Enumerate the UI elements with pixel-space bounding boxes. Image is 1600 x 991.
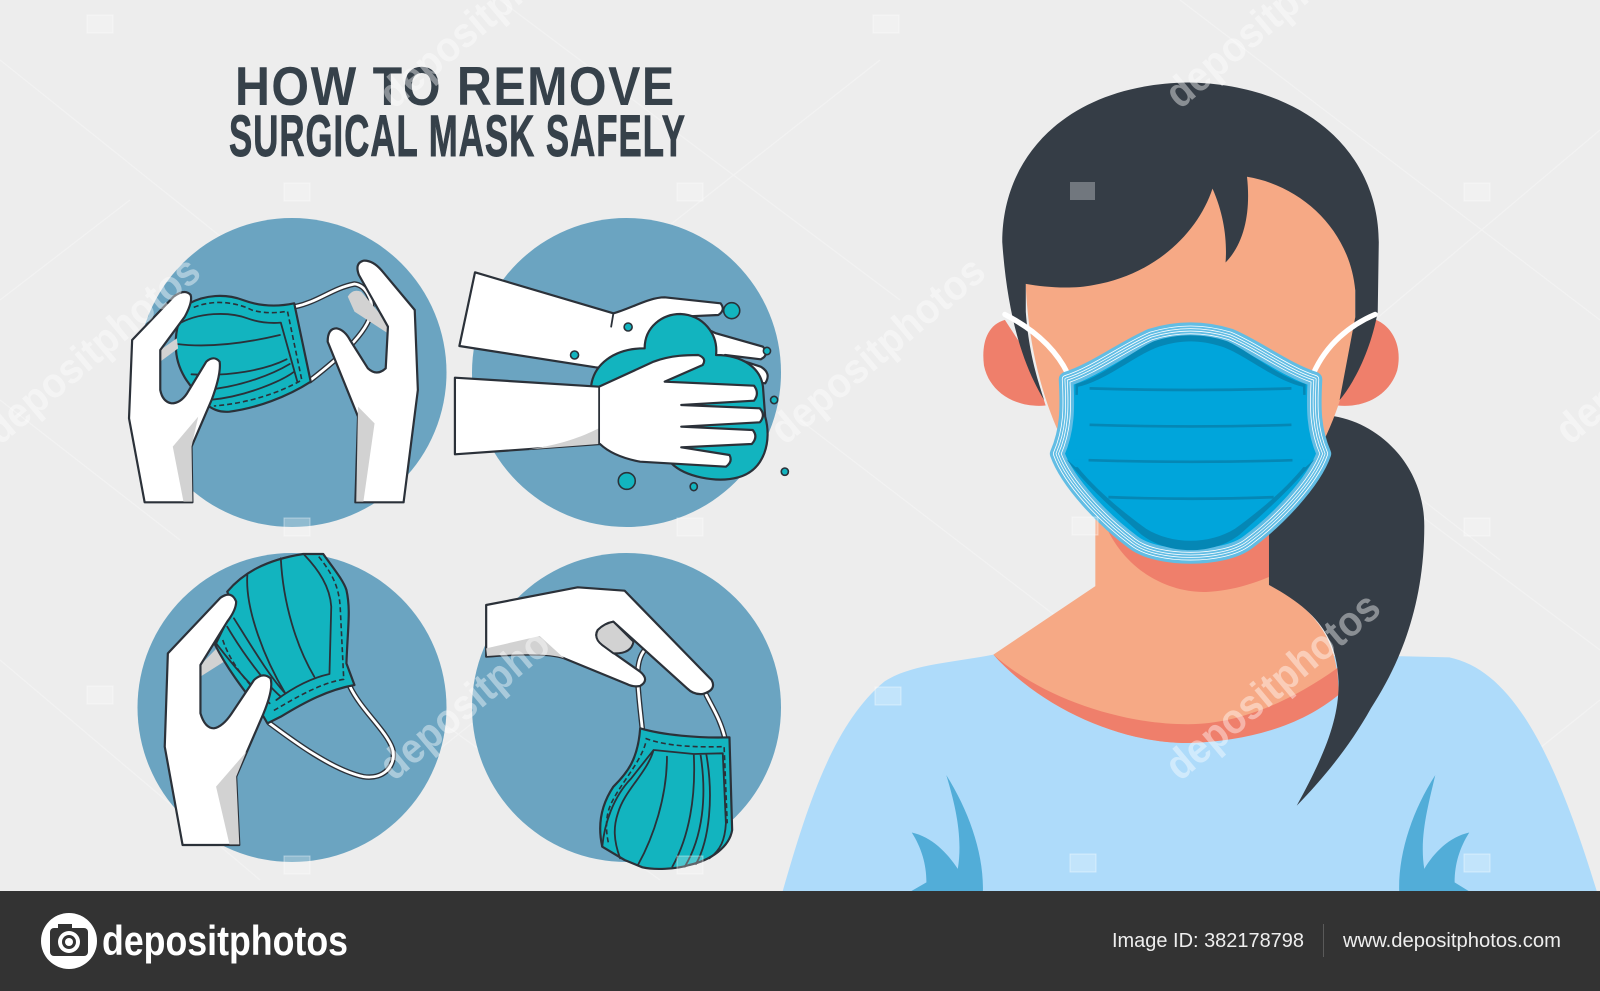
illustration: woman wearing surgical mask bbox=[783, 82, 1597, 891]
neck and chest bbox=[993, 515, 1339, 743]
upper arm and hand bbox=[459, 272, 768, 383]
neck shadow bbox=[1102, 515, 1269, 592]
panel: step 3 hold mask by ear loop bbox=[138, 553, 446, 862]
title: HOW TO REMOVE bbox=[235, 55, 677, 117]
shirt fold left bbox=[911, 775, 983, 891]
ponytail bbox=[1269, 416, 1424, 806]
collar shadow bbox=[993, 655, 1339, 743]
ear loop bbox=[295, 284, 372, 381]
watermarks: depositphotos bbox=[761, 247, 994, 453]
panel: step 4 drop mask bbox=[472, 553, 781, 869]
panel: step 1 untie ear loops bbox=[129, 218, 446, 527]
ear loop bbox=[270, 687, 393, 777]
back finger shade bbox=[200, 647, 224, 677]
image id: Image ID: 382178798 bbox=[1112, 930, 1304, 952]
hair bbox=[1002, 82, 1379, 400]
watermarks bbox=[0, 0, 1600, 789]
panel: step 2 wash hands bbox=[455, 218, 788, 527]
hand bbox=[486, 587, 713, 694]
shirt fold right bbox=[1399, 775, 1469, 891]
brand name: depositphotos bbox=[102, 917, 348, 964]
surgical mask bbox=[600, 728, 732, 869]
lower arm and hand bbox=[455, 355, 763, 467]
left mask strap bbox=[1005, 314, 1068, 373]
right hand bbox=[328, 261, 418, 502]
left hand bbox=[129, 292, 220, 502]
hand bbox=[165, 595, 271, 845]
footer bar bbox=[0, 891, 1600, 991]
surgical mask bbox=[176, 296, 311, 412]
right ear bbox=[1337, 320, 1399, 406]
watermarks: depositphotos bbox=[1156, 583, 1389, 789]
title: SURGICAL MASK SAFELY bbox=[229, 105, 685, 169]
watermarks: depositphotos bbox=[370, 583, 603, 789]
blue surgical mask bbox=[1057, 330, 1324, 556]
ear loops bbox=[638, 650, 725, 738]
foam bubbles bbox=[571, 303, 788, 491]
website url: www.depositphotos.com bbox=[1342, 930, 1561, 952]
left ear bbox=[983, 320, 1046, 406]
soap foam bbox=[591, 314, 768, 480]
surgical mask bbox=[215, 554, 354, 723]
icon: depositphotos camera logo bbox=[41, 913, 97, 969]
shirt bbox=[783, 655, 1597, 891]
right mask strap bbox=[1313, 314, 1375, 373]
face bbox=[1026, 162, 1355, 440]
title bbox=[229, 55, 685, 169]
